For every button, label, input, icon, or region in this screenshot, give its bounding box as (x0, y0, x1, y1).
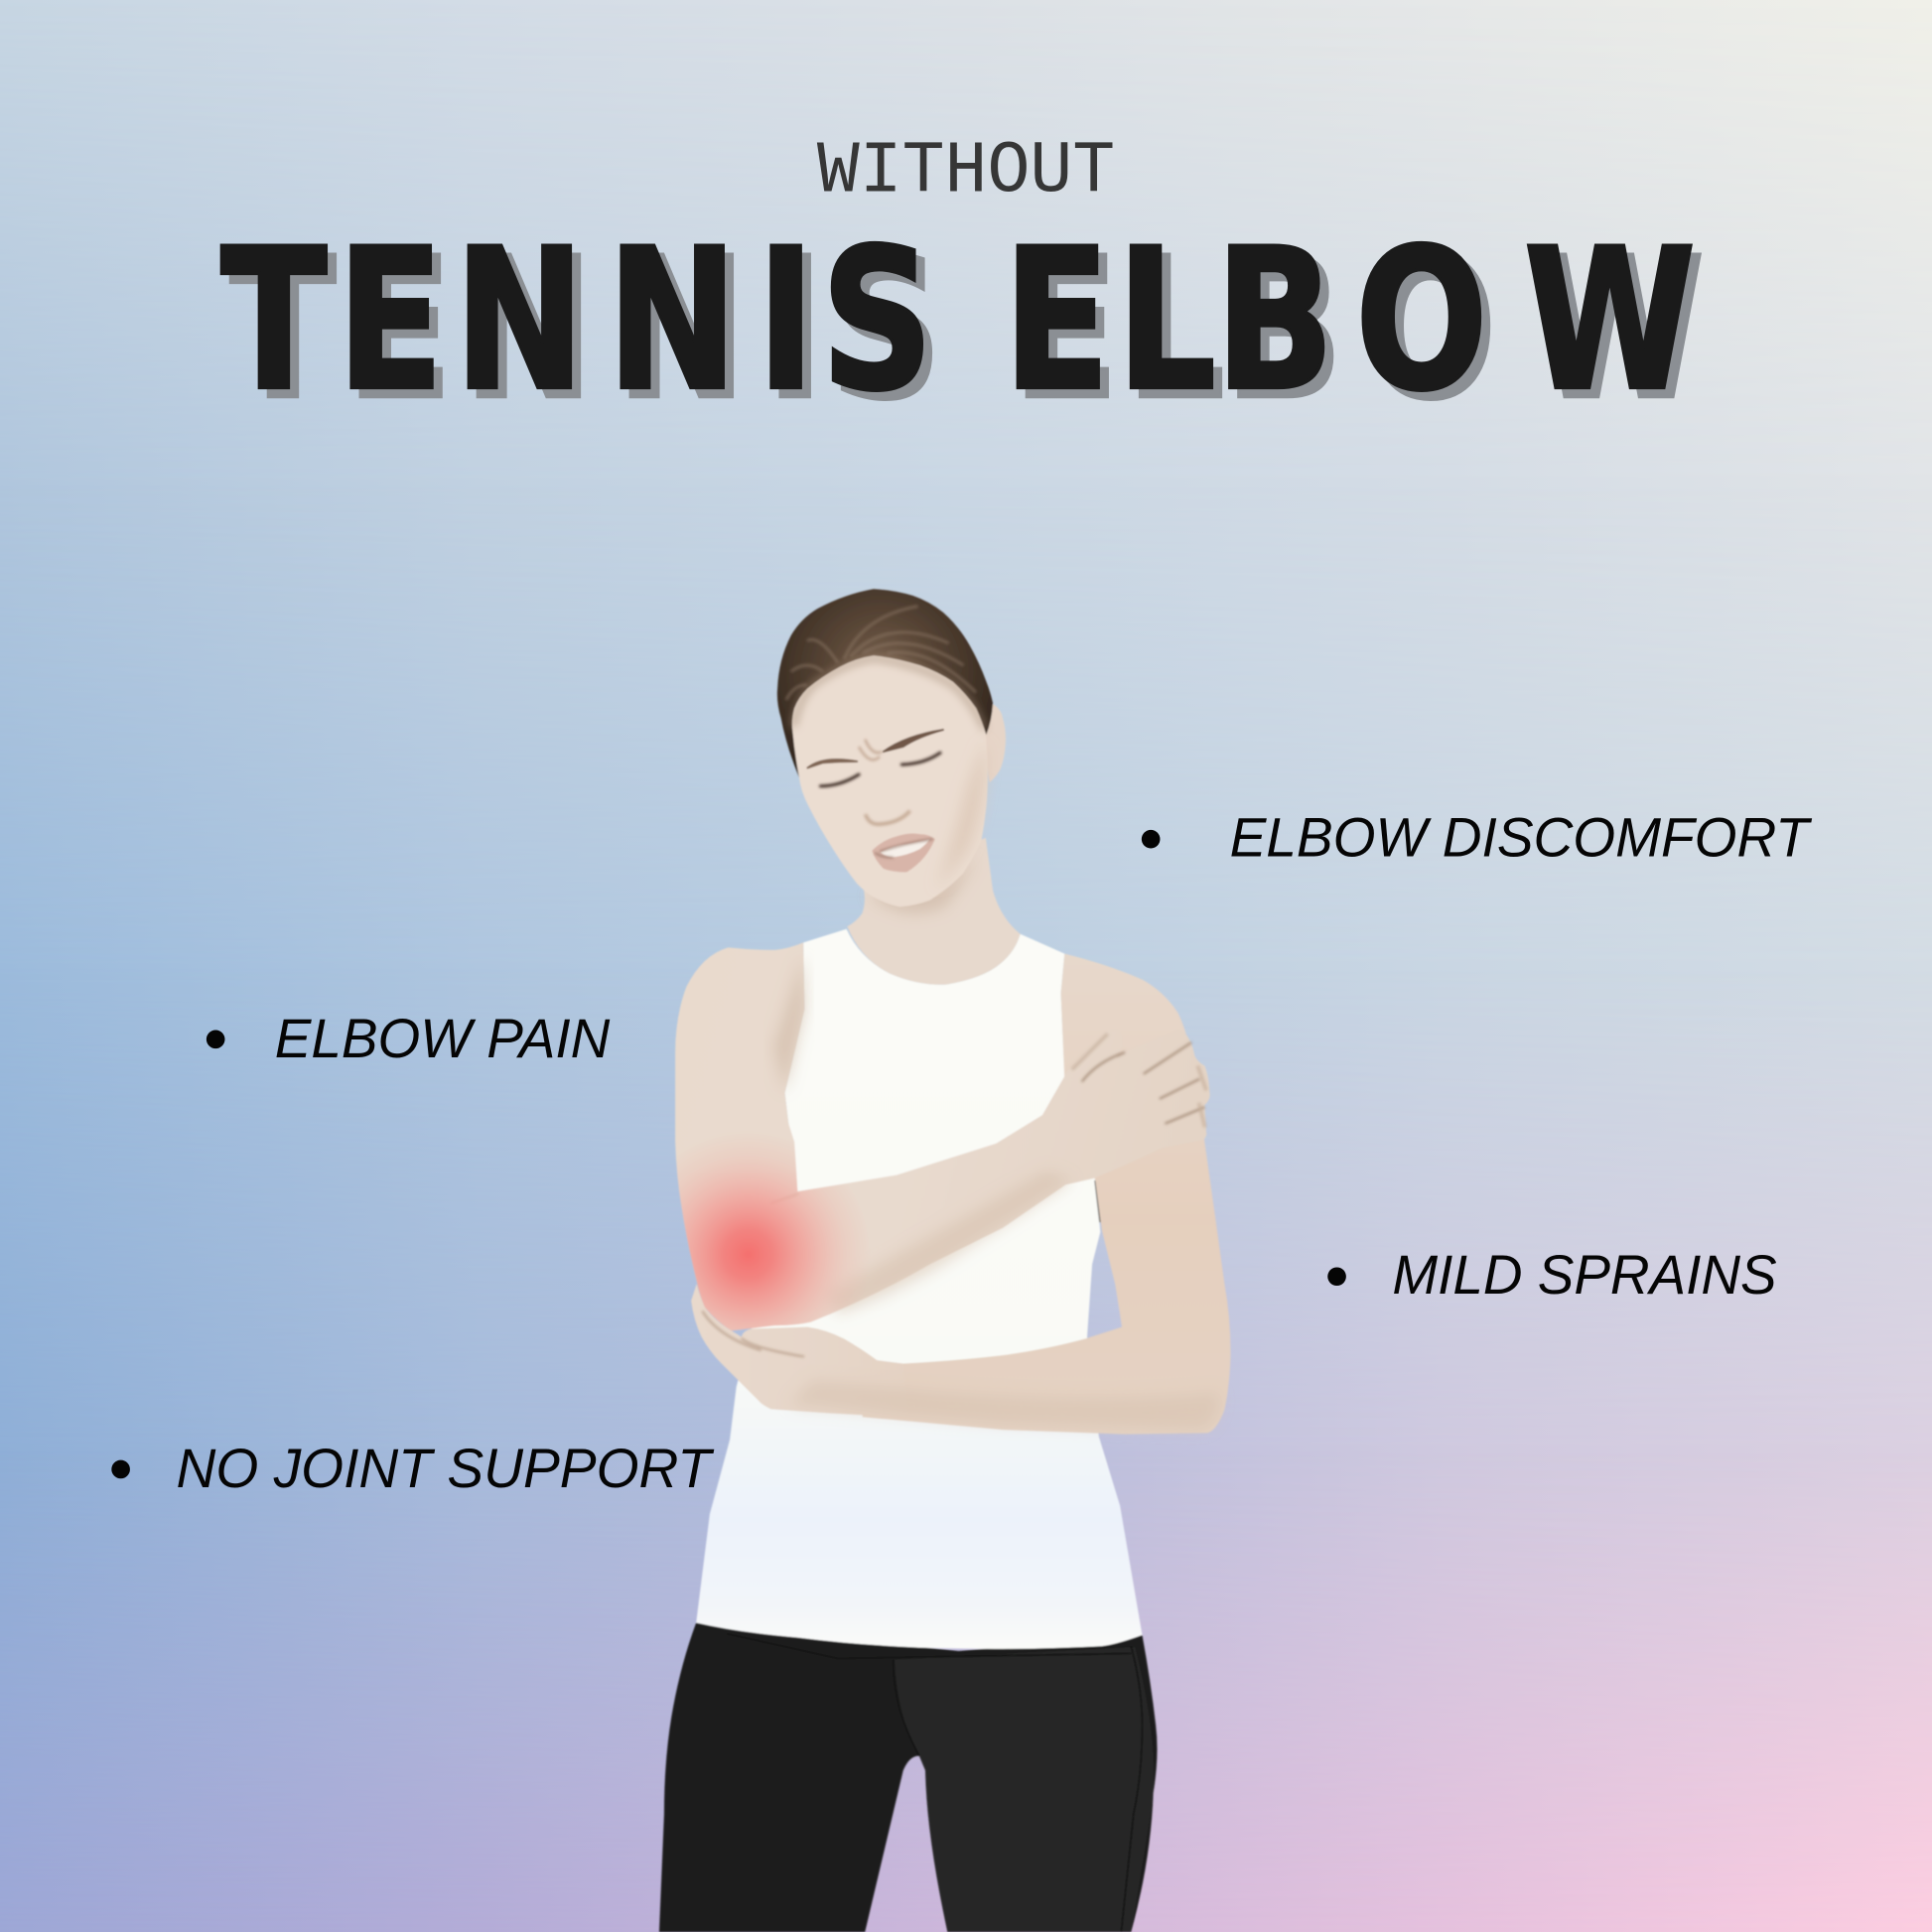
upper arm and lower forearm (863, 954, 1230, 1435)
right closed eye (901, 753, 940, 764)
thumb and knuckle texture (1072, 1034, 1206, 1128)
neck (847, 838, 1021, 985)
red pain glow on elbow (679, 1149, 853, 1330)
ear (983, 702, 1006, 782)
leggings (659, 1622, 1158, 1932)
illustration: woman holding her elbow (624, 589, 1230, 1932)
frown lines (859, 740, 883, 759)
soft hairline (793, 658, 985, 730)
bullet: ELBOW DISCOMFORT: ELBOW DISCOMFORT (1230, 806, 1813, 869)
title drop shadow: TENNIS ELBOW (229, 215, 1705, 443)
cheek and jaw shading (936, 740, 986, 890)
eyebrow label: WITHOUT: WITHOUT (817, 130, 1115, 213)
armpit shading (773, 955, 804, 1093)
title main text: TENNIS ELBOW (220, 207, 1696, 434)
mouth with teeth (872, 833, 935, 872)
right eyebrow (884, 730, 943, 752)
cradling hand (691, 1284, 909, 1418)
hair (777, 589, 993, 777)
head (777, 589, 1006, 906)
left eyebrow (807, 759, 857, 767)
forearm underside shading (826, 1171, 1072, 1313)
finger creases (1082, 1042, 1204, 1124)
hand creases (702, 1311, 804, 1356)
bullet: MILD SPRAINS: MILD SPRAINS (1392, 1243, 1777, 1306)
bullet: ELBOW PAIN: ELBOW PAIN (275, 1007, 611, 1069)
face (788, 640, 988, 906)
neck shadow (868, 857, 978, 912)
nose highlight and nostrils (866, 811, 910, 824)
title: TENNIS ELBOW (220, 207, 1705, 443)
bullet: NO JOINT SUPPORT: NO JOINT SUPPORT (176, 1437, 715, 1499)
hair strands (786, 607, 976, 700)
image-left arm with forearm and hand on shoulder (675, 942, 1210, 1330)
sleeveless white tank top (696, 929, 1142, 1649)
gap shadow line between tank and arm (1095, 1180, 1100, 1222)
left closed eye (821, 774, 859, 786)
elbow crease (771, 1194, 798, 1203)
lower arm shading (788, 1380, 1220, 1430)
